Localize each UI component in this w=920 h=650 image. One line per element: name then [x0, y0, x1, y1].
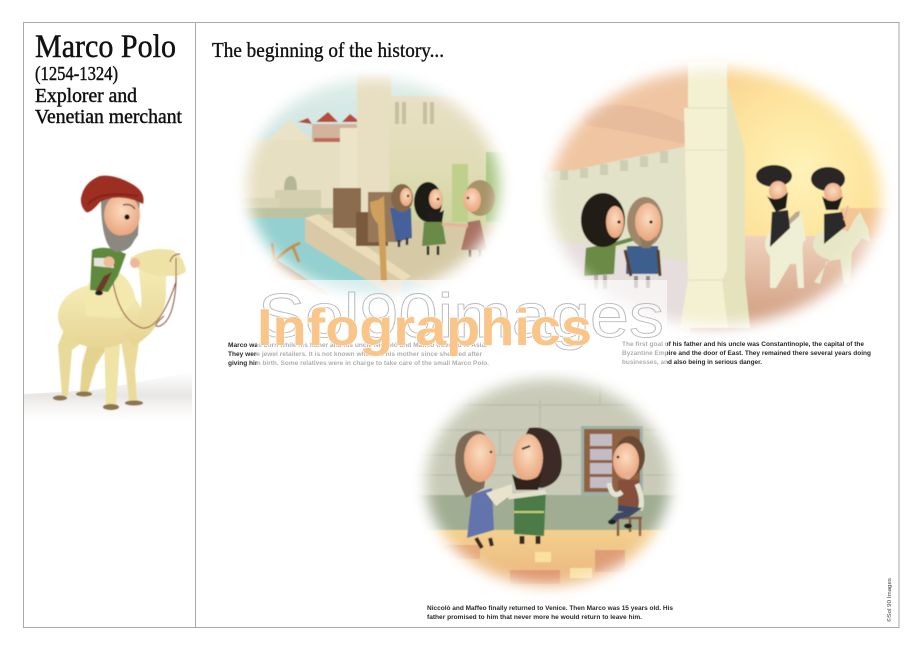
- ground: [551, 240, 688, 326]
- rider body: [90, 248, 140, 296]
- illustration: scene three, Marco and his father in Venice: [418, 371, 678, 595]
- caption three: Niccolò and Maffeo finally returned to Venice. Then Marco was 15 years old. His: [427, 606, 674, 612]
- mother in blue dress: [455, 431, 512, 548]
- caption two: Byzantine Empire and the door of East. They remained there several years doing: [622, 351, 871, 357]
- caption one: They were jewel retailers. It is not known who was his mother since she died after: [228, 352, 483, 358]
- title: Marco Polo: [35, 29, 176, 65]
- heading: The beginning of the history...: [212, 38, 444, 62]
- watermark: Sol90images outline: Sol90images: [258, 282, 664, 351]
- caption one: [228, 343, 489, 367]
- woman in rose dress: [442, 180, 495, 257]
- illustration: Marco Polo riding a camel: [24, 176, 192, 420]
- tiled floor: [430, 529, 666, 595]
- crates: [333, 188, 402, 246]
- Niccolo in green with black hair: [414, 182, 446, 255]
- panel: title sidebar: [35, 29, 182, 128]
- caption three: father promised to him that never more he would return to leave him.: [427, 615, 642, 621]
- life dates: (1254-1324): [35, 63, 118, 85]
- caption two: businesses, and also being in serious danger.: [622, 360, 762, 366]
- sunset sky: [550, 60, 890, 240]
- credit: ©Sol 90 Images: [886, 578, 893, 622]
- role line one: Explorer and: [35, 85, 137, 107]
- caption one: Marco was born while his father and his uncle Niccolò and Maffeo traveled to Asia.: [228, 343, 487, 349]
- camel: [53, 249, 186, 410]
- stone tower: [680, 62, 750, 328]
- caption one: giving him birth. Some relatives were in charge to take care of the small Marco Polo.: [228, 361, 489, 367]
- ground shadow: [24, 372, 192, 420]
- illustration: scene two, Constantinople gate: [542, 60, 890, 335]
- window: [581, 426, 643, 496]
- Niccolo embracing: [508, 428, 562, 544]
- illustration: scene one, Venice harbour: [240, 74, 508, 300]
- quay: [319, 214, 494, 286]
- horseman left: [756, 165, 806, 288]
- watermark: [257, 280, 667, 370]
- merchant in blue: [390, 184, 413, 247]
- rider head with red cap: [81, 176, 144, 252]
- lower wall band: [418, 494, 678, 531]
- tower and back wall: [356, 74, 508, 226]
- sky: [252, 75, 450, 140]
- city wall: [543, 146, 688, 262]
- caption three: [427, 606, 674, 621]
- caption two: The first goal of his father and his uncle was Constantinople, the capital of the: [622, 342, 865, 348]
- stone wall: [418, 371, 678, 496]
- caption two: [622, 342, 871, 366]
- Maffeo in blue tunic: [625, 197, 663, 288]
- boat: [271, 260, 327, 294]
- young Marco seated on chair: [608, 436, 645, 536]
- Niccolo with black hair and green robe: [581, 193, 636, 289]
- water: [244, 217, 430, 300]
- mooring post: [370, 196, 387, 282]
- watermark: Infographics orange: Infographics: [257, 299, 592, 357]
- role line two: Venetian merchant: [35, 106, 182, 128]
- horseman right: [811, 167, 870, 284]
- castle: [240, 112, 358, 218]
